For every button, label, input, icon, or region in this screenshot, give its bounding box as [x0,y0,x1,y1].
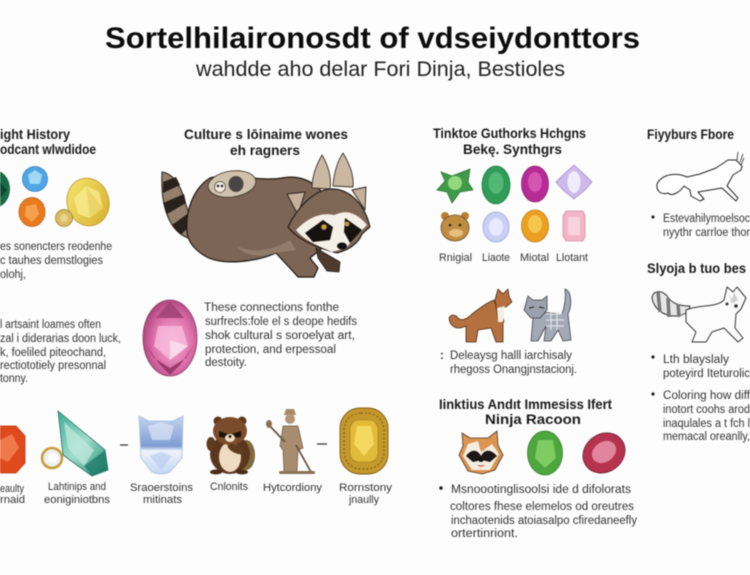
panel: gem symbols [433,125,592,376]
icon: gold framed gem [340,408,388,474]
heading: culture: eh ragners [230,142,300,158]
panel: bottom row [0,408,393,506]
labels: gem grid [439,252,588,264]
heading: ninja racoon: Ninja Racoon [485,411,581,427]
text: slyoja notes [651,354,750,443]
icon: outlined animal [657,152,744,201]
subtitle: wahdde aho delar Fori Dinja, Bestioles [195,58,565,81]
text: history note: rectiototiely presonnal [0,360,106,372]
labels: bottom row: rnaid [0,494,25,506]
heading: culture [184,126,348,158]
icon: striped animal [652,287,746,342]
icon: brown cat [449,289,512,342]
labels: bottom row: eaulty [0,483,24,495]
heading: ninja racoon [439,396,612,427]
text: culture connections: destoity. [205,357,247,369]
text: ninja note [439,484,637,540]
text: culture connections: shok cultural s soroelyat art, [205,330,355,342]
icon: gem grid [437,165,592,242]
title: Sortelhilaironosdt of vdseiydonttors [105,22,640,55]
text: history note: l artsaint loames often [0,319,101,331]
text: slyoja notes: Coloring how diff [663,390,750,402]
text: history body: c tauhes demstlogies [0,255,103,267]
text: culture connections: These connections fonthe [204,302,339,314]
panel: ninja racoon [439,396,637,540]
labels: bottom row: Sraoerstoins [130,482,193,494]
heading: history [0,126,96,157]
text: cat note: Deleaysg halll iarchisaly [450,350,572,362]
labels: bottom row: Hytcordiony [263,482,323,494]
text: history note: k, foeliled piteochand, [0,347,106,359]
text: culture connections: protection, and erpessoal [205,344,336,356]
heading: history: odcant wlwdidoe [0,141,96,157]
heading: ninja racoon: Iinktius Andıt Immesiss Ifert [439,396,612,412]
icon: seated raccoon [206,416,255,474]
labels: bottom row: mitinats [143,494,183,506]
text: culture connections: surfrecls:fole el s deope hedifs [205,316,357,328]
text: ninja note: ortertinriont. [451,528,518,540]
text: slyoja notes: poteyird Iteturolic [663,368,750,380]
labels: bottom row: eoniginiotbns [44,494,110,506]
labels: bottom row: Lahtinips and [48,481,106,493]
heading: culture: Culture s lōinaime wones [184,126,348,142]
icon: large raccoon [162,153,370,277]
icon: blue gem [139,416,183,474]
icon: pink gem [143,300,197,376]
labels: gem grid: Liaote [482,252,510,264]
text: cat note [440,350,577,376]
icon: figure with staff [266,409,315,474]
icon: red gem [575,425,633,481]
text: history body: olohj, [0,269,26,281]
text: cat note: : [440,350,444,362]
icon: teal gem with ring [42,411,108,476]
text: history note [0,319,121,385]
text: slyoja notes: Lth blayslaly [663,354,729,366]
text: history note: tonny. [0,373,28,385]
labels: gem grid: Rnigial [439,252,472,264]
labels: bottom row [0,481,393,506]
text: cat note: rhegoss Onangjnstacionj. [450,364,577,376]
text: culture connections [204,302,357,369]
text: history body [0,241,112,281]
icon: grey cat [524,289,571,341]
icon: history gems [0,166,114,230]
heading: gem symbols: Bekę. Synthgrs [463,141,562,157]
text: history note: zal i diderarias doon luck, [0,333,121,345]
heading: gem symbols: Tinktoe Guthorks Hchgns [433,125,586,141]
text: ninja note: Msnoootinglisoolsi ide d difolorats [451,484,631,496]
labels: gem grid: Llotant [556,252,588,264]
heading: history: ight History [0,126,70,142]
text: ninja note: inchaotenids atoiasalpo cfiredaneefly [451,515,637,527]
dashes [120,444,327,445]
labels: bottom row: Cnlonits [210,481,248,493]
panel: history [0,126,121,385]
text: fiyyburs note [651,213,750,239]
icon: raccoon face [459,431,503,474]
icon: green gem [528,431,562,475]
panel: right column [647,126,750,443]
labels: gem grid: Miotal [520,252,549,264]
heading: fiyyburs: Fiyyburs Fbore [647,126,734,142]
heading: gem symbols [433,125,586,157]
labels: bottom row: jnaully [348,494,379,506]
labels: bottom row: Rornstony [339,482,393,494]
panel: culture [143,126,370,376]
text: history body: es sonencters reodenhe [0,241,112,253]
text: ninja note: coltores fhese elemelos od oreutres [450,501,634,513]
icon: orange gem [0,426,25,473]
